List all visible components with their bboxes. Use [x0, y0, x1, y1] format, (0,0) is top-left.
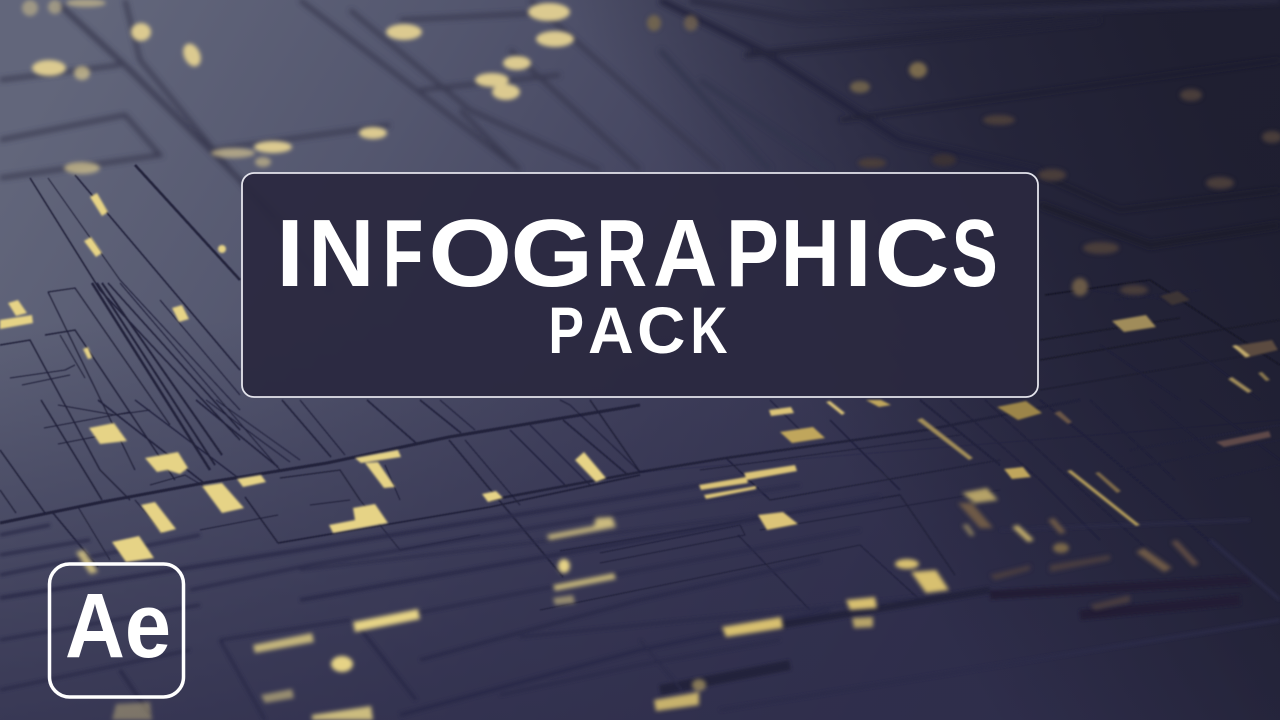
title: INFOGRAPHICS: P	[726, 200, 779, 307]
title: INFOGRAPHICS: F	[383, 200, 423, 307]
title: INFOGRAPHICS: I	[844, 200, 872, 307]
gold pads: blurred top left	[22, 0, 574, 174]
subtitle: PACK: K	[690, 293, 728, 367]
title: INFOGRAPHICS: I	[276, 200, 304, 307]
gold pads: upper left sharp	[0, 193, 226, 359]
icon: After Effects logo: Ae	[65, 575, 171, 677]
background: blurred streaks bottom	[0, 472, 1280, 720]
title: INFOGRAPHICS: C	[874, 200, 950, 307]
gold pads: lower left	[89, 423, 606, 562]
title: INFOGRAPHICS: A	[653, 200, 717, 307]
title: INFOGRAPHICS: G	[510, 200, 593, 307]
gold pads: right edge sharp	[1112, 291, 1278, 393]
gold pads: dim top right	[647, 15, 1280, 296]
background: sharp lines middle	[0, 165, 1280, 610]
gold pads: centre right	[699, 400, 1271, 530]
title: INFOGRAPHICS: S	[952, 200, 998, 307]
icon: After Effects logo	[50, 564, 184, 697]
title panel	[242, 173, 1038, 397]
background: blurred lines top	[0, 0, 1280, 290]
subtitle: PACK: P	[548, 293, 584, 367]
title: INFOGRAPHICS: R	[596, 200, 647, 307]
gold pads: lower left blurred	[76, 517, 616, 720]
gold pads: lower right blurred	[654, 488, 1199, 711]
title: INFOGRAPHICS: N	[308, 200, 374, 307]
subtitle: PACK: C	[637, 293, 686, 367]
title: INFOGRAPHICS: H	[781, 200, 840, 307]
title: INFOGRAPHICS: O	[428, 200, 512, 307]
subtitle: PACK: A	[588, 293, 634, 367]
